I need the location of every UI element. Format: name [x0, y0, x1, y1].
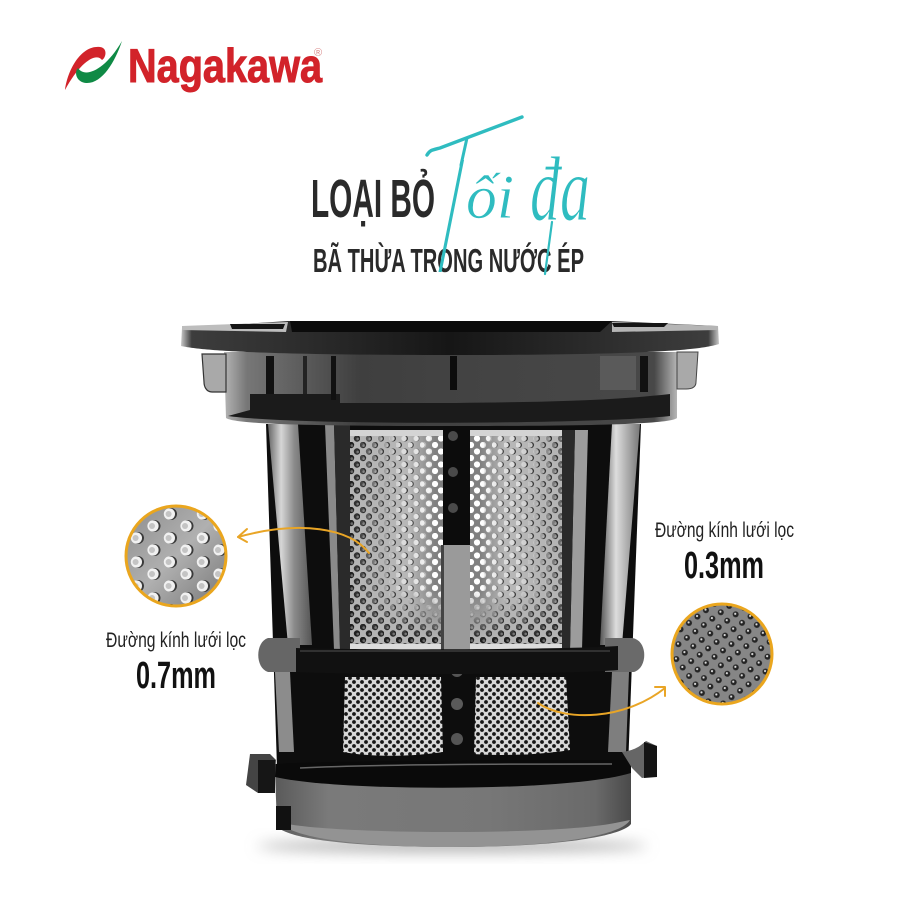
- heading script: Tối đa: đa: [530, 138, 590, 240]
- right glass wall: [600, 424, 640, 645]
- icon: red and green swoosh: [65, 41, 122, 90]
- label right: Đường kính lưới lọc: [655, 519, 794, 542]
- lower right mesh: [474, 677, 570, 755]
- heading script: Tối đa: T: [421, 101, 485, 313]
- subheading: BÃ THỪA TRONG NƯỚC ÉP: [313, 242, 584, 279]
- top rim: [181, 321, 719, 355]
- lower left mesh: [343, 677, 443, 756]
- base shadow: [257, 840, 647, 852]
- left glass wall: [268, 424, 312, 645]
- brand name: Nagakawa: [128, 39, 323, 92]
- upper left mesh: [350, 430, 443, 653]
- callout: 0.3mm mesh: [538, 519, 794, 715]
- heading script: Tối đa: [425, 115, 588, 276]
- heading script: Tối đa: ối: [466, 164, 514, 232]
- arrow left: [238, 528, 369, 553]
- middle ring: [258, 638, 644, 674]
- value left: 0.7mm: [136, 655, 216, 697]
- logo: Nagakawa: [65, 39, 323, 92]
- label left: Đường kính lưới lọc: [106, 629, 246, 652]
- grey base: [275, 772, 631, 847]
- arrow right: [538, 687, 665, 715]
- cone body: [266, 424, 641, 768]
- title: [313, 115, 588, 276]
- inner left strut: [325, 424, 340, 650]
- base ring and clips: [246, 741, 657, 793]
- filter basket product: [181, 321, 719, 852]
- callout: 0.7mm mesh: [106, 506, 369, 697]
- registered mark: ®: [314, 47, 322, 59]
- upper right mesh: [470, 430, 562, 653]
- heading: Loại bỏ: LOẠI BỎ: [311, 169, 435, 229]
- top collar: [202, 352, 698, 426]
- zoom circle right: [670, 602, 774, 706]
- value right: 0.3mm: [684, 545, 764, 587]
- centre column: [441, 425, 470, 650]
- right tab: [677, 352, 698, 389]
- zoom circle left: [126, 506, 226, 606]
- lower section: [275, 665, 629, 756]
- left tab: [202, 354, 226, 392]
